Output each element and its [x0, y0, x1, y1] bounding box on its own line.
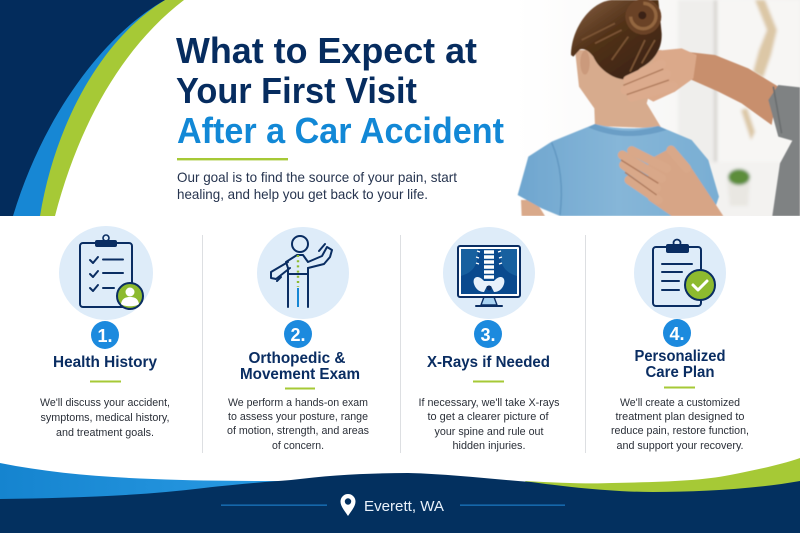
location text: Everett, WA [364, 498, 444, 515]
heading: orthopedic and movement exam [240, 350, 360, 383]
step number 1: 1. [97, 326, 113, 346]
description: We'll discuss your accident, [40, 397, 170, 409]
step number 3: 3. [480, 325, 496, 345]
description: We'll create a customized [620, 397, 740, 409]
heading: x-rays if needed: X-Rays if Needed [427, 354, 550, 371]
footer waves [0, 458, 800, 533]
heading: personalized care plan: Personalized [634, 348, 726, 365]
title: What to Expect at [176, 30, 477, 71]
step number 1 [91, 321, 119, 349]
heading: personalized care plan [634, 348, 726, 381]
icon: care plan with check badge [634, 227, 726, 319]
description: We perform a hands-on exam [228, 397, 368, 409]
step number 2 [284, 320, 312, 348]
description: to get a clearer picture of [428, 411, 549, 423]
icon: clipboard with checklist and person [59, 226, 153, 320]
heading: personalized care plan: Care Plan [646, 364, 714, 381]
description: hidden injuries. [452, 440, 526, 452]
panel: step 1 health history [40, 226, 170, 439]
therapist arm [685, 52, 778, 125]
panel: step 2 orthopedic and movement exam [227, 227, 369, 452]
description: and treatment goals. [56, 427, 154, 439]
description: your spine and rule out [434, 426, 544, 438]
heading: orthopedic and movement exam: Orthopedic & [248, 350, 346, 367]
subtitle: healing, and help you get back to your life. [177, 186, 428, 202]
heading: health history: Health History [53, 354, 157, 371]
title: After a Car Accident [177, 110, 504, 151]
heading: orthopedic and movement exam: Movement Exam [240, 366, 360, 383]
therapist shirt [768, 85, 800, 216]
description [418, 397, 560, 452]
title underline [177, 158, 288, 160]
accent line [90, 380, 121, 382]
description [227, 397, 369, 452]
lower hand [648, 148, 723, 216]
shirt [518, 124, 719, 216]
photo: therapist examining patient's neck and back [515, 0, 800, 216]
description: of motion, strength, and areas [227, 425, 369, 437]
subtitle: Our goal is to find the source of your pain, start [177, 169, 457, 185]
accent line [473, 380, 504, 382]
description: and support your recovery. [616, 440, 744, 452]
skin: neck and head [575, 50, 662, 128]
description: symptoms, medical history, [40, 412, 170, 424]
icon: location pin [340, 494, 356, 516]
panel: step 4 personalized care plan [611, 227, 749, 452]
hair [571, 0, 662, 79]
title [176, 30, 504, 151]
icon: x-ray monitor [443, 227, 535, 319]
description: of concern. [272, 440, 324, 452]
description: to assess your posture, range [228, 411, 368, 423]
panel: step 3 x-rays if needed [418, 227, 560, 452]
description [611, 397, 749, 452]
upper hand [648, 48, 697, 102]
footer location [221, 494, 565, 516]
accent line [285, 388, 315, 390]
icon: body with spine [257, 227, 349, 319]
step number 2: 2. [290, 325, 306, 345]
description [40, 397, 170, 439]
step number 4 [663, 319, 691, 347]
title: Your First Visit [176, 70, 417, 111]
step number 4: 4. [669, 324, 685, 344]
description: treatment plan designed to [616, 411, 744, 423]
description: If necessary, we'll take X-rays [418, 397, 560, 409]
description: reduce pain, restore function, [611, 425, 749, 437]
hero swoosh shapes [0, 0, 184, 216]
accent line [664, 386, 695, 388]
subtitle [177, 169, 457, 202]
step number 3 [474, 320, 502, 348]
